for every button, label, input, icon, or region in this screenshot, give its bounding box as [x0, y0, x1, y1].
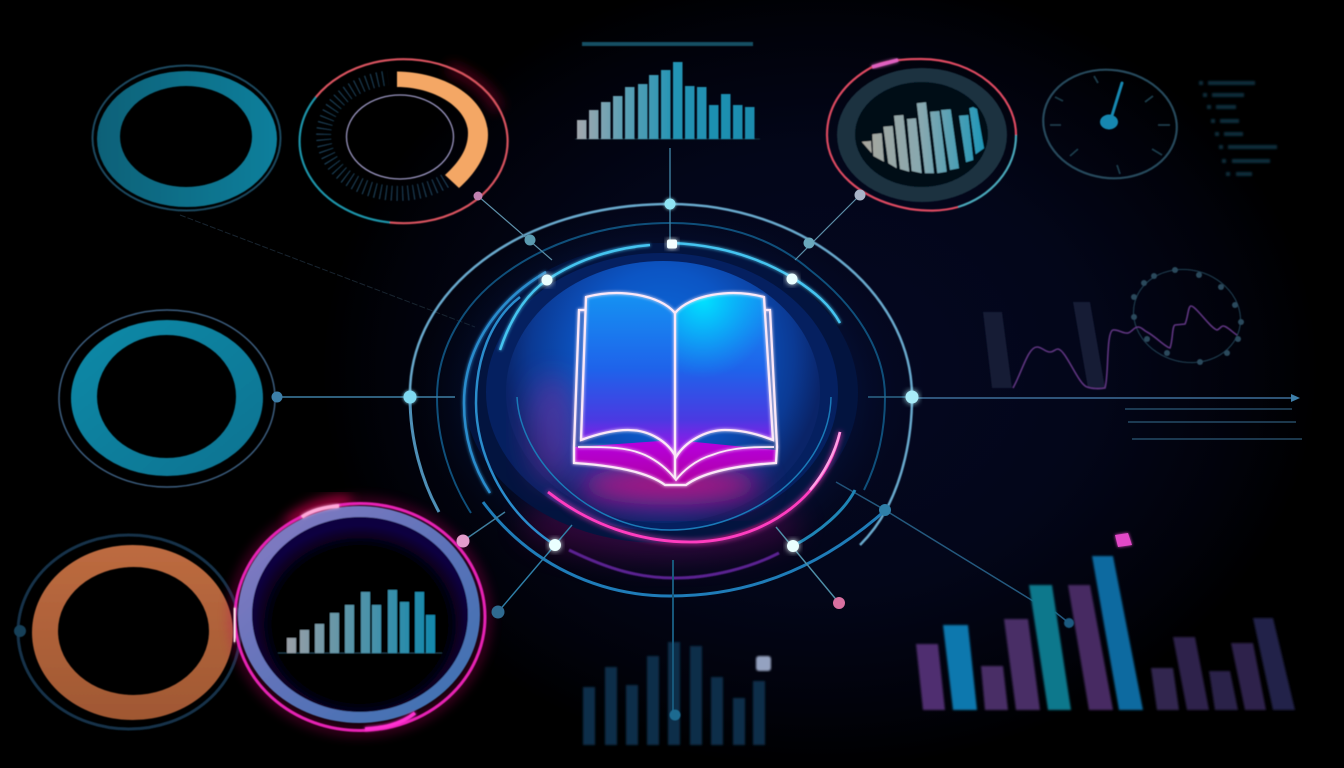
- hub bright disk: [506, 261, 820, 523]
- chart: bottom-centre bars: [583, 642, 765, 745]
- hub dark disk: [464, 243, 858, 543]
- book magenta page block: [574, 440, 776, 485]
- chart: teal bar over connector: [1029, 585, 1071, 710]
- chart: right line chart: [983, 258, 1251, 389]
- hub violet side glow: [527, 375, 579, 485]
- panel: top bar chart: [575, 42, 760, 139]
- ring arcs: [410, 204, 912, 596]
- chart: bottom-right slanted bars: [916, 556, 1295, 710]
- connector: faint upper-left dashed line: [180, 215, 475, 327]
- arrow: right horizontal axis: [912, 394, 1300, 402]
- connector: upper-left diagonal: [478, 196, 552, 260]
- connector: right spoke: [868, 396, 912, 398]
- icon: bottom grey square marker: [756, 656, 771, 671]
- connector: bottom spoke: [672, 560, 674, 715]
- connector: lower-left long diagonal: [498, 525, 572, 612]
- panel: lower pink ring with bar chart: [234, 502, 486, 731]
- connector: lower-right line to bars: [836, 482, 1074, 628]
- icon: open book: [574, 293, 777, 485]
- panel: top donut gauge: [300, 59, 508, 223]
- nodes: connector points: [272, 190, 918, 720]
- hub glow: [416, 205, 906, 585]
- connector: upper-right diagonal: [795, 195, 860, 260]
- panel: top-left teal ring: [92, 66, 280, 210]
- book outline: [574, 293, 777, 485]
- book pages: [581, 293, 773, 457]
- book cyan highlight: [675, 293, 770, 400]
- hub magenta underglow: [578, 465, 762, 505]
- icon: pink square marker: [1115, 533, 1132, 547]
- icon: dial gauge: [1036, 61, 1184, 187]
- text lines: right caption rules: [1125, 409, 1302, 439]
- hub: central circular emblem: [410, 204, 912, 596]
- connector: left spoke: [277, 396, 455, 398]
- connector: top spoke: [669, 148, 671, 245]
- connector: lower-right diagonal: [776, 527, 839, 603]
- connector: lower-left short diagonal: [463, 512, 505, 541]
- list: faint bullet list: [1199, 81, 1277, 176]
- panel: lower-left orange ring: [14, 535, 240, 729]
- panel: mid-left teal ring: [59, 310, 275, 487]
- panel: top-right ring with bar chart: [827, 59, 1016, 211]
